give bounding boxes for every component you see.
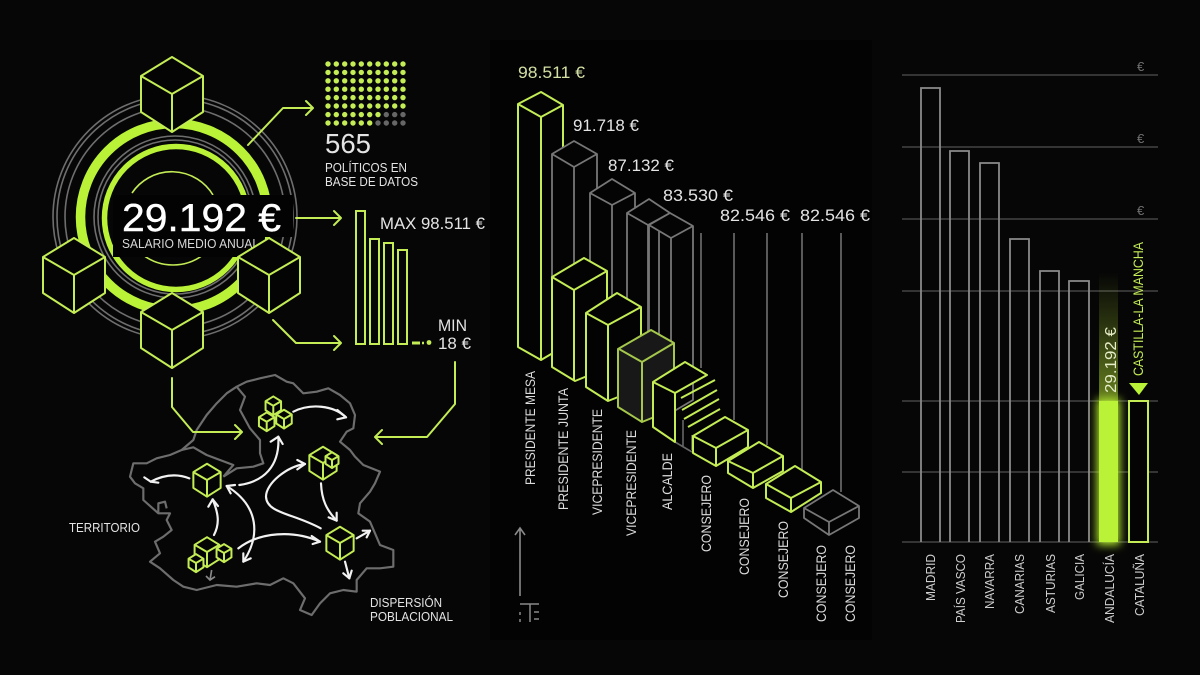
inner arcs (132, 172, 213, 265)
column 3 (590, 179, 635, 383)
value labels: 91.718 € (573, 116, 640, 135)
map cube: left (193, 464, 221, 497)
box: consejero 1 (693, 417, 748, 466)
max label: MAX 98.511 € (380, 214, 486, 233)
role labels: VICEPRESIDENTE (623, 430, 639, 536)
map cube: lower right (326, 527, 354, 560)
column 5 (649, 213, 693, 413)
euro axis labels: € (1137, 131, 1145, 146)
region labels: GALICIA (1072, 554, 1087, 600)
value labels: 82.546 € (720, 206, 791, 225)
value labels (518, 63, 871, 225)
region labels: NAVARRA (982, 554, 997, 609)
gray bars (921, 88, 1089, 542)
map cube: lower left cluster (189, 537, 231, 572)
role labels: CONSEJERO (775, 521, 791, 598)
arrow to dot grid (248, 101, 313, 145)
label backing (113, 195, 293, 257)
inner green ring (104, 146, 248, 290)
thick green ring (80, 124, 268, 310)
average value: 29.192 € (1103, 327, 1120, 393)
mini bar chart (356, 211, 431, 345)
value labels: 98.511 € (518, 63, 586, 82)
map: territory (130, 375, 393, 615)
marker triangle (1129, 383, 1148, 395)
central dark panel (490, 40, 872, 640)
euro axis labels: € (1137, 203, 1145, 218)
min label: 18 € (438, 334, 472, 353)
andalucia bar (1099, 401, 1118, 542)
value caption: SALARIO MEDIO ANUAL (122, 236, 259, 251)
andalucia glow (1097, 399, 1120, 545)
cube bottom (141, 293, 203, 368)
ring diagram: average salary (43, 57, 300, 368)
role labels: CONSEJERO (813, 545, 829, 622)
politicians stat (325, 128, 418, 189)
cube right (238, 238, 300, 313)
min label (438, 316, 472, 353)
column 2 (552, 141, 597, 353)
right bar chart (902, 59, 1158, 623)
dispersion label (370, 595, 453, 624)
cataluna bar (1129, 401, 1148, 542)
value labels: 82.546 € (800, 206, 871, 225)
outer gray rings (53, 95, 297, 339)
role labels (522, 370, 858, 622)
region labels: CANARIAS (1012, 554, 1027, 614)
arrow to max bar (296, 211, 341, 225)
up arrow (515, 528, 525, 596)
isometric column chart (518, 92, 859, 535)
box: consejero 4 (804, 490, 859, 535)
min label: MIN (438, 316, 467, 335)
region labels: ANDALUCÍA (1102, 554, 1117, 623)
column 4 (627, 199, 670, 393)
dispersion label: POBLACIONAL (370, 609, 453, 624)
grid lines (902, 75, 1158, 542)
role labels: ALCALDE (659, 453, 675, 510)
thin value stems (701, 233, 841, 492)
region labels: MADRID (923, 554, 938, 601)
value labels: 87.132 € (608, 156, 675, 175)
politicians stat: 565 (325, 128, 371, 159)
euro axis labels: € (1137, 59, 1145, 74)
column 1: presidente mesa (518, 92, 563, 360)
cube top (141, 57, 203, 132)
politicians stat: POLÍTICOS EN (325, 160, 407, 175)
logo mark (520, 604, 539, 622)
map cube: right with overlay (309, 447, 339, 480)
box: vicepresidente (586, 293, 641, 401)
role labels: CONSEJERO (736, 498, 752, 575)
region labels: CATALUÑA (1132, 554, 1147, 616)
box: alcalde (653, 362, 707, 442)
arrow from min to map (375, 362, 455, 444)
value: 29.192 € (122, 197, 281, 240)
value labels: 83.530 € (663, 186, 734, 205)
hatch stems (675, 420, 692, 452)
castilla label: CASTILLA-LA MANCHA (1131, 242, 1146, 376)
dot grid: 565 politicians (325, 61, 406, 126)
role labels: CONSEJERO (842, 545, 858, 622)
box: consejero 3 (766, 466, 821, 512)
role labels: PRESIDENTE JUNTA (555, 387, 571, 510)
role labels: CONSEJERO (698, 475, 714, 552)
role labels: PRESIDENTE MESA (522, 370, 538, 485)
box: consejero 2 (728, 442, 783, 488)
euro axis labels (1137, 59, 1145, 218)
dispersion label: DISPERSIÓN (370, 595, 442, 610)
region labels (923, 554, 1147, 623)
hatch lines (681, 380, 720, 427)
box: presidente junta (552, 258, 607, 381)
territory label: TERRITORIO (69, 520, 140, 535)
map flow arrows (144, 407, 370, 580)
region labels: PAÍS VASCO (953, 554, 968, 623)
politicians stat: BASE DE DATOS (325, 174, 418, 189)
cube left (43, 238, 105, 313)
average fade (1099, 272, 1118, 401)
box: vicepresidente 2 (618, 330, 674, 422)
arrow to min bar (273, 320, 341, 350)
role labels: VICEPRESIDENTE (589, 409, 605, 515)
arrow into map (172, 378, 242, 439)
map cube: top cluster (259, 396, 292, 431)
region labels: ASTURIAS (1043, 554, 1058, 613)
